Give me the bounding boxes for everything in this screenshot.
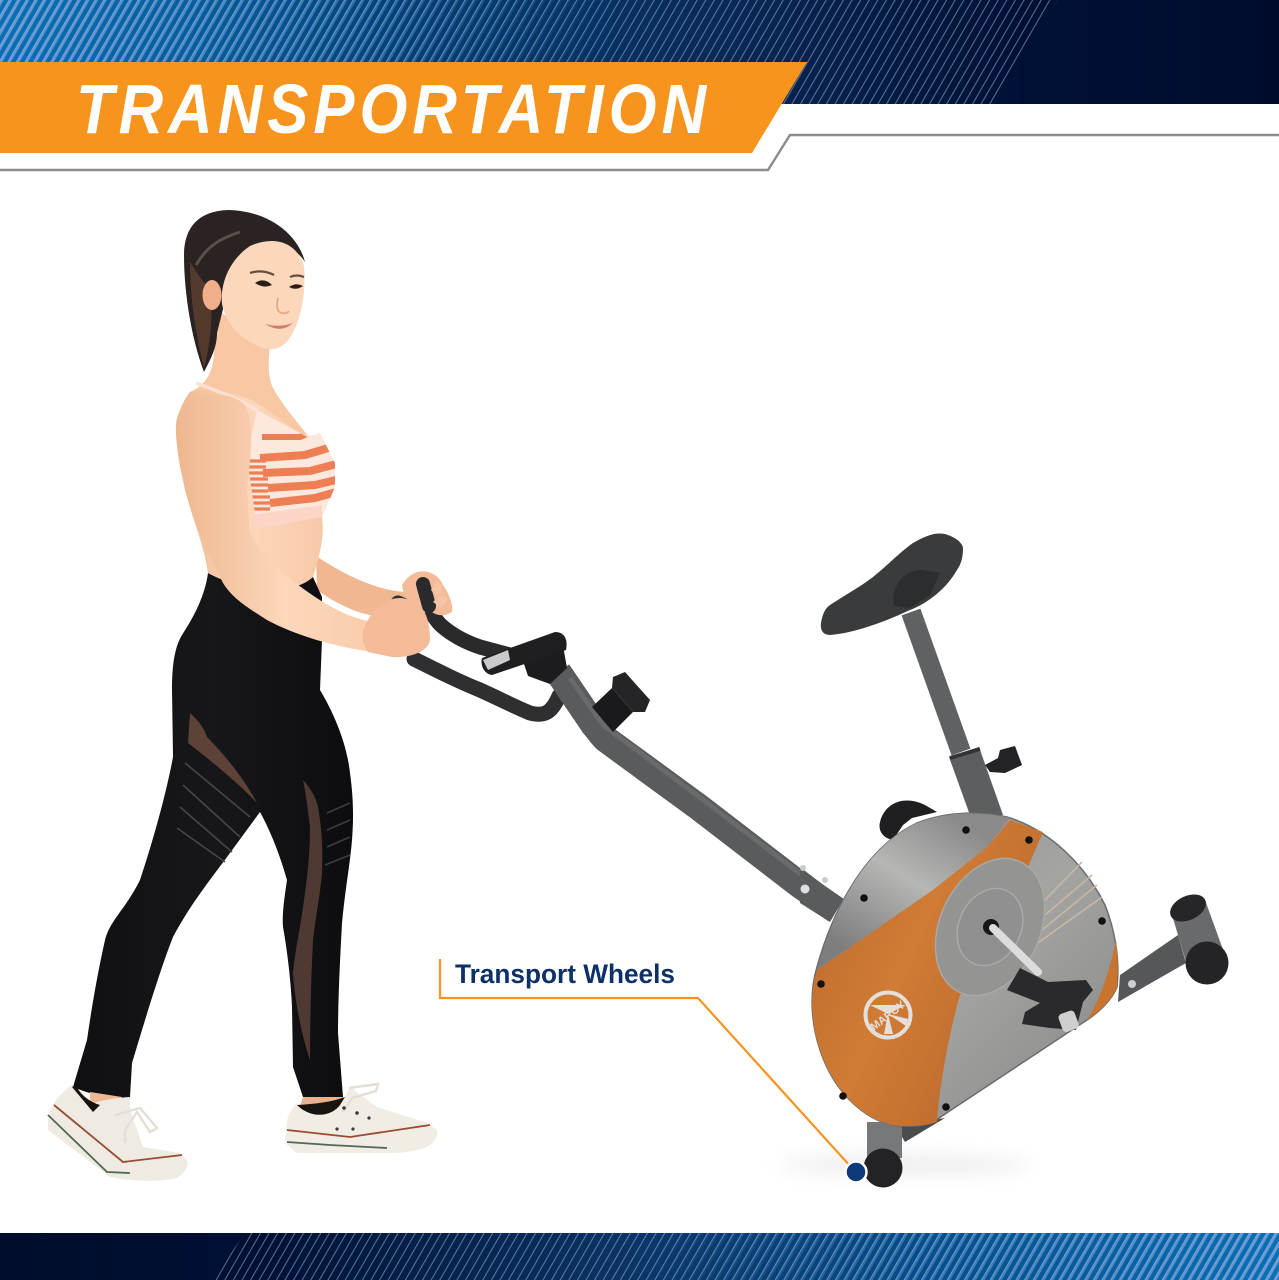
seat collar ring <box>950 749 980 758</box>
base bar <box>895 1118 945 1142</box>
right orange sliver <box>1087 940 1118 1020</box>
sports bra <box>196 383 340 528</box>
title: TRANSPORTATION <box>76 69 707 148</box>
near arm <box>176 395 395 655</box>
console <box>481 632 567 675</box>
mouth <box>265 323 293 329</box>
eyebrows <box>250 271 304 277</box>
torso <box>176 390 323 590</box>
wheel strut <box>867 1122 902 1158</box>
title banner <box>0 62 807 153</box>
seat post <box>911 612 961 752</box>
upper handlebar <box>423 584 510 655</box>
far pedal strap <box>880 800 937 840</box>
right ankle and shoe <box>285 1084 437 1153</box>
nose <box>277 298 289 313</box>
seat collar <box>949 747 1003 818</box>
far hand <box>402 571 452 615</box>
calf stitching <box>325 803 350 865</box>
eyes <box>255 280 303 289</box>
woman figure <box>48 210 437 1181</box>
hair streak <box>196 232 240 265</box>
ponytail and hair <box>184 210 305 372</box>
header band <box>0 0 1279 104</box>
leader line <box>440 959 851 1167</box>
flywheel housing <box>812 813 1118 1126</box>
footer band <box>0 1233 1279 1280</box>
thigh stitching <box>177 763 250 862</box>
calf mesh panel <box>293 780 322 1060</box>
ponytail highlight <box>190 262 212 368</box>
lower handlebar <box>398 603 559 714</box>
marker dot <box>846 1162 866 1182</box>
left ankle and shoe <box>48 1085 188 1181</box>
main post <box>558 672 836 910</box>
crank arm <box>993 928 1038 972</box>
near hand <box>363 598 430 657</box>
far arm <box>316 556 412 617</box>
brand logo: MARCY <box>868 999 908 1033</box>
far hand grip <box>423 584 429 606</box>
exercise bike <box>398 533 1228 1188</box>
housing screws <box>817 826 1106 1111</box>
far hand fingers <box>431 580 448 607</box>
adjustment clamp <box>592 688 633 732</box>
header rule line <box>0 135 1279 170</box>
seat cushion shading <box>893 570 940 608</box>
bracket <box>800 865 843 922</box>
seat knob <box>985 746 1022 773</box>
ear <box>202 280 222 310</box>
orange panel <box>812 820 1043 1126</box>
crank disc <box>914 841 1066 1013</box>
callout: transport wheels <box>440 959 866 1182</box>
callout label: Transport Wheels <box>455 959 675 989</box>
floor shadow <box>780 1156 1030 1174</box>
post highlight <box>570 678 815 885</box>
transport wheel <box>864 1148 902 1188</box>
top silver panel <box>817 813 1010 970</box>
console stem <box>520 640 567 684</box>
pedal <box>1007 968 1093 1033</box>
rear stabilizer <box>1118 889 1228 1002</box>
hip mesh panel <box>188 713 257 803</box>
adjustment knob <box>612 672 650 712</box>
seat <box>821 533 963 635</box>
face <box>222 241 304 349</box>
brand logo <box>866 992 910 1038</box>
rib lines <box>1035 862 1102 945</box>
leggings <box>73 573 353 1100</box>
neck <box>190 308 308 440</box>
